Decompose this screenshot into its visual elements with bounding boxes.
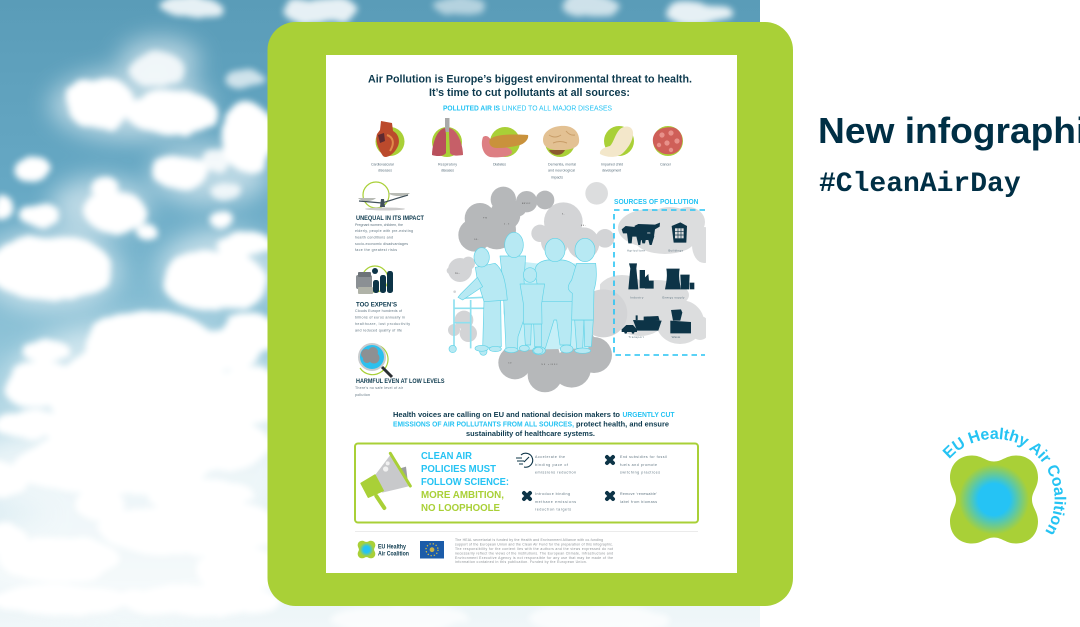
icon: cross 2: [524, 493, 530, 499]
text: too expensive: healthcare, lost productivity: [355, 322, 410, 326]
source icons: [622, 222, 694, 339]
call to action text: sustainability of healthcare systems.: [466, 429, 595, 438]
text: unequal in its impact: elderly, people with pre-existing: [355, 229, 413, 233]
disease labels: impacts: [551, 176, 563, 180]
pollutant labels: NO x/NO2: [542, 364, 559, 366]
icon: building: [672, 222, 687, 243]
disease labels: Dementia, mental: [548, 162, 576, 166]
walker: [454, 297, 485, 348]
icon: cross 1: [607, 457, 613, 463]
call to action text: [393, 410, 675, 438]
icon: brain: [543, 126, 579, 157]
icon: cows: [622, 223, 660, 245]
dashed bracket: [614, 210, 705, 355]
icon: fetus: [600, 126, 634, 157]
hashtag: #CleanAirDay: [819, 169, 1021, 200]
source labels: Buildings: [668, 248, 683, 252]
text: unequal in its impact: [355, 215, 424, 252]
icon: money and rising bars: [356, 266, 393, 294]
pollutant labels: PM: [483, 218, 488, 220]
disclaimer text: support of the European Union and the Clean Air Fund for the preparation of this infographic.: [455, 542, 613, 546]
icon: magnifying glass: [359, 344, 392, 377]
disease labels: Cancer: [660, 162, 672, 166]
policy demands text: reduction targets: [535, 508, 571, 512]
text: too expensive: [355, 302, 410, 332]
pollutant labels: 2.5: [504, 223, 511, 225]
disclaimer text: Environment Executive Agency is not responsible for any use that may be made of the: [455, 556, 613, 560]
disease labels: diseases: [441, 168, 454, 172]
icon: waste bin: [670, 309, 691, 333]
logo: coalition small: Air Coalition: [378, 552, 409, 558]
icon: cross 3: [607, 493, 613, 499]
icon: pancreas and stomach: [482, 127, 528, 157]
source labels: Industry: [630, 295, 644, 299]
disease labels: Diabetes: [493, 162, 506, 166]
source labels: Transport: [628, 335, 644, 339]
policy demands text: label from biomass: [620, 500, 657, 504]
pollutant labels: CO: [508, 362, 512, 364]
pollutant labels: [455, 203, 587, 366]
heading: sources: SOURCES OF POLLUTION: [614, 197, 698, 206]
policy demands text: Introduce binding: [535, 492, 570, 496]
disease labels: Cardiovascular: [371, 162, 395, 166]
text: unequal in its impact: UNEQUAL IN ITS IMPACT: [356, 215, 424, 222]
icon: tumour: [653, 126, 683, 156]
pollutant labels: O₃: [562, 214, 565, 216]
icon: heart: [376, 121, 404, 157]
subheading: polluted air: [443, 104, 612, 113]
text: too expensive: billions of euros annually in: [355, 316, 405, 320]
subheading: polluted air: LINKED TO ALL MAJOR DISEASES: [502, 104, 612, 113]
text: unequal in its impact: health conditions and: [355, 236, 393, 240]
disease labels: and neurological: [548, 168, 575, 172]
disclaimer text: The responsibility for the content lies with the authors and the views expressed do not: [455, 547, 613, 551]
policy demands text: [535, 455, 667, 512]
figure: man: [533, 238, 577, 355]
central smoke clouds and pollutants: [447, 182, 627, 392]
green frame: [268, 22, 793, 606]
subheading: polluted air: POLLUTED AIR IS: [443, 104, 500, 113]
poster title: [368, 74, 692, 99]
sources of pollution panel: [614, 197, 705, 355]
logo: coalition small: EU Healthy: [378, 544, 407, 550]
disease labels: development: [602, 168, 621, 172]
panel: clean air policies: [355, 444, 698, 522]
sources background clouds: [600, 207, 706, 344]
policy demands text: switching practices: [620, 470, 660, 474]
call to action text: EMISSIONS OF AIR POLLUTANTS FROM ALL SOURCES,: [393, 420, 574, 428]
poster title: It’s time to cut pollutants at all sources:: [429, 87, 630, 99]
policy demands text: binding pace of: [535, 463, 568, 467]
source labels: Agriculture: [627, 248, 645, 252]
policy demands text: emissions reduction: [535, 470, 576, 474]
text: too expensive: and reduced quality of life: [355, 328, 402, 332]
text: unequal in its impact: face the greatest risks: [355, 248, 397, 252]
icon: balance scales: [358, 182, 410, 210]
call to action text: protect health, and ensure: [576, 420, 669, 428]
text: too expensive: Clouds Europe hundreds of: [355, 309, 402, 313]
sky photo background: [0, 0, 760, 627]
disease labels: diseases: [378, 168, 392, 172]
footer: [355, 531, 698, 564]
headline: clean air: [421, 451, 509, 514]
text: harmful even at low levels: [355, 378, 445, 397]
source labels: Energy supply: [662, 295, 685, 299]
logo: coalition small: [358, 541, 409, 558]
icon: lungs: [432, 118, 463, 157]
icon: factory: [628, 263, 654, 289]
headline: clean air: NO LOOPHOOLE: [421, 503, 500, 514]
logo: EU Healthy Air Coalition: EU Healthy Air Coalition: [942, 428, 1066, 534]
poster panel: [326, 55, 737, 573]
disease icons row: [371, 118, 683, 180]
headline: clean air: FOLLOW SCIENCE:: [421, 477, 509, 488]
text: too expensive: TOO EXPEN’S: [356, 302, 398, 309]
figure: older man with walker: [458, 248, 507, 352]
text: harmful even at low levels: HARMFUL EVEN AT LOW LEVELS: [356, 378, 445, 385]
left column: impacts: [355, 182, 445, 397]
icon: speedometer: [516, 453, 533, 467]
policy demands text: Remove ‘renewable’: [620, 492, 657, 496]
text: unequal in its impact: socio-economic disadvantages: [355, 242, 408, 246]
pollutant labels: NMVOC: [522, 203, 531, 205]
text: harmful even at low levels: pollution: [355, 393, 370, 397]
policy demands text: End subsidies for fossil: [620, 455, 667, 459]
family silhouettes: [449, 232, 596, 355]
poster title: Air Pollution is Europe’s biggest environmental threat to health.: [368, 74, 692, 86]
figure: woman behind: [500, 232, 526, 353]
call to action text: Health voices are calling on EU and national decision makers to: [393, 410, 620, 419]
logo: EU flag: [420, 541, 444, 558]
source labels: [627, 248, 685, 339]
policy demands text: methane emissions: [535, 500, 576, 504]
policy demands text: Accelerate the: [535, 455, 565, 459]
text: unequal in its impact: Pregnant women, children, the: [355, 223, 403, 227]
disclaimer text: information contained in this publication. Funded by the European Union.: [455, 560, 587, 564]
figure: pregnant woman: [568, 238, 596, 353]
disease labels: Respiratory: [438, 162, 457, 166]
pollutant labels: SO₂: [474, 239, 479, 241]
pollutant labels: NH₃: [581, 225, 587, 227]
policy demands text: fuels and promote: [620, 463, 657, 467]
family backing mass: [503, 260, 592, 350]
disease labels: Impaired child: [601, 162, 623, 166]
pollutant labels: PM₁₀: [455, 273, 461, 275]
disease labels: [371, 162, 672, 180]
icon: megaphone: [361, 453, 410, 508]
icon: ship and car: [622, 315, 662, 334]
headline: clean air: CLEAN AIR: [421, 451, 473, 462]
disclaimer text: [455, 538, 613, 564]
disclaimer text: The HEAL secretariat is funded by the Health and Environment Alliance with co-funding: [455, 538, 603, 542]
call to action text: URGENTLY CUT: [622, 410, 675, 419]
source labels: Waste: [672, 335, 681, 339]
text: harmful even at low levels: There’s no safe level of air: [355, 386, 404, 390]
headline: clean air: POLICIES MUST: [421, 464, 497, 475]
figure: child: [519, 268, 545, 354]
disclaimer text: necessarily reflect the views of the institutions. The European Climate, Infrastructure and: [455, 552, 613, 556]
headline: clean air: MORE AMBITION,: [421, 490, 504, 501]
icon: power plant: [665, 269, 694, 289]
